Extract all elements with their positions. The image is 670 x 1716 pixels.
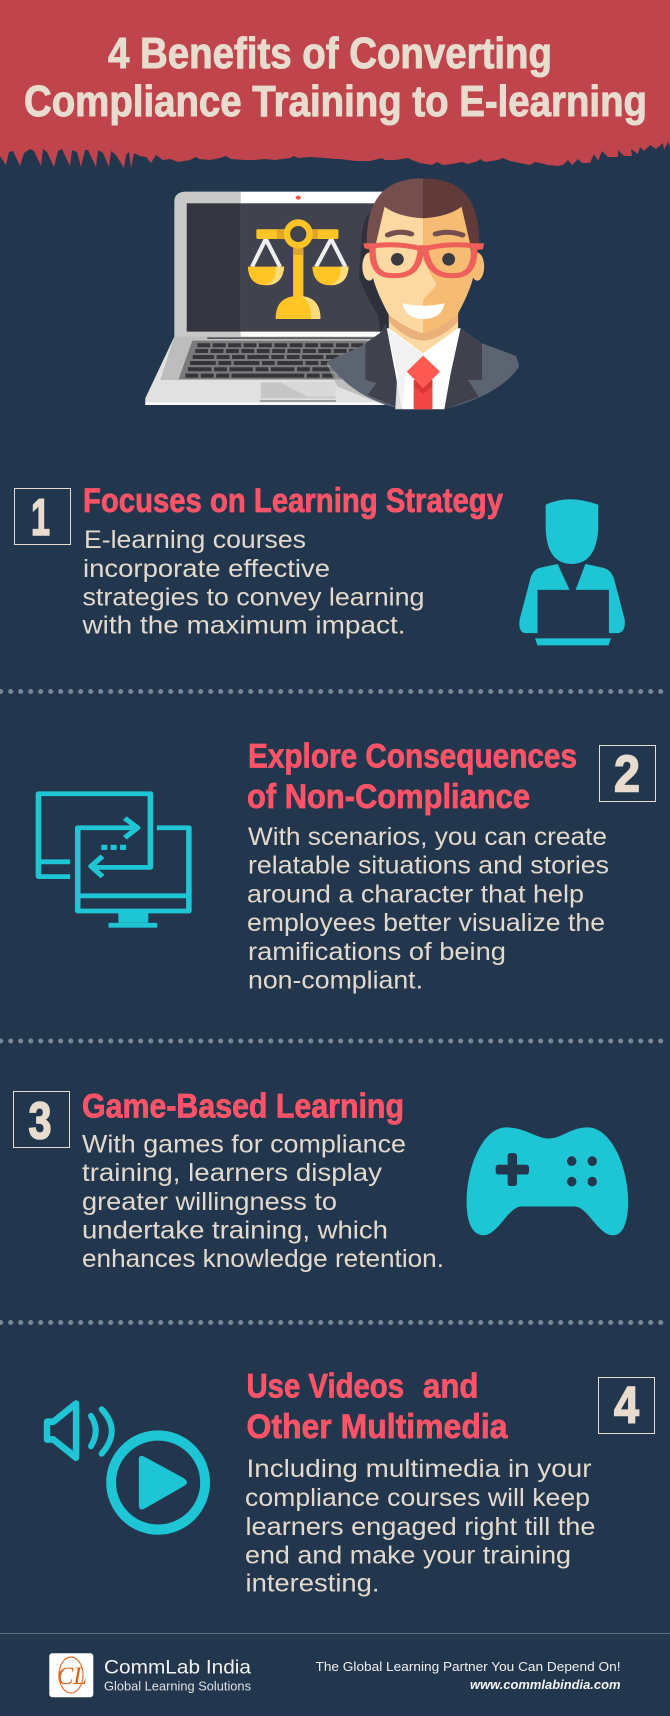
number badge 3: 3: [28, 1092, 52, 1150]
number badge 1: 1: [31, 489, 50, 547]
body text 4: Including multimedia in your: [246, 1455, 592, 1483]
body text 1: [81, 526, 425, 640]
section 3: [14, 1088, 628, 1273]
divider dots: [1, 1320, 670, 1325]
footer: [0, 1634, 670, 1697]
section 4: [47, 1368, 655, 1598]
body text 2: non-compliant.: [248, 966, 423, 994]
body text 4: learners engaged right till the: [246, 1513, 596, 1541]
body text 1: incorporate effective: [83, 555, 330, 583]
section 1: [14, 482, 625, 645]
body text 3: undertake training, which: [82, 1216, 388, 1244]
body text 1: strategies to convey learning: [82, 584, 425, 612]
body text 2: relatable situations and stories: [248, 852, 609, 880]
tagline: [316, 1659, 621, 1692]
body text 4: end and make your training: [245, 1542, 571, 1570]
character: [326, 178, 519, 409]
number badge 2: [600, 746, 656, 804]
body text 2: employees better visualize the: [247, 909, 605, 937]
body text 1: E-learning courses: [84, 526, 306, 554]
icon: speaker and play button: [47, 1404, 205, 1530]
heading 4: [246, 1368, 509, 1446]
body text 3: training, learners display: [82, 1159, 383, 1187]
body text 1: with the maximum impact.: [81, 612, 406, 640]
body text 2: [247, 823, 609, 994]
title: 4 Benefits of Converting: [108, 29, 552, 78]
icon: game controller: [467, 1127, 628, 1235]
laptop: [145, 192, 386, 405]
icon: connected monitors: [38, 794, 189, 928]
heading 2: of Non-Compliance: [247, 778, 530, 816]
logo mark: CL: [57, 1663, 87, 1690]
heading 1: Focuses on Learning Strategy: [83, 482, 503, 520]
company name: [104, 1656, 251, 1694]
body text 3: greater willingness to: [82, 1188, 337, 1216]
body text 2: With scenarios, you can create: [248, 823, 607, 851]
company name: CommLab India: [104, 1656, 251, 1678]
number badge 4: 4: [614, 1377, 639, 1435]
section 2: [38, 738, 655, 994]
number badge 3: [14, 1092, 70, 1150]
heading 4: and: [423, 1368, 478, 1406]
body text 2: around a character that help: [247, 880, 584, 908]
heading 2: [247, 738, 577, 816]
tagline: www.commlabindia.com: [470, 1677, 621, 1692]
logo mark: [49, 1653, 93, 1697]
body text 3: With games for compliance: [82, 1130, 406, 1158]
body text 3: enhances knowledge retention.: [82, 1245, 444, 1273]
body text 2: ramifications of being: [248, 938, 506, 966]
number badge 2: 2: [614, 746, 640, 804]
body text 4: [245, 1455, 596, 1598]
number badge 4: [598, 1377, 654, 1435]
heading 3: Game-Based Learning: [82, 1088, 404, 1126]
heading 4: Other Multimedia: [246, 1408, 509, 1446]
header banner: [0, 0, 670, 176]
icon: scales of justice: [248, 219, 349, 319]
company name: Global Learning Solutions: [104, 1678, 251, 1694]
tagline: The Global Learning Partner You Can Depend On!: [316, 1659, 620, 1674]
icon: person at laptop: [519, 499, 625, 645]
number badge 1: [14, 488, 70, 547]
divider dots: [1, 1038, 670, 1044]
heading 2: Explore Consequences: [248, 738, 577, 776]
illustration: laptop with scales and character: [145, 178, 519, 409]
body text 4: compliance courses will keep: [245, 1484, 590, 1512]
title: [24, 29, 647, 126]
body text 4: interesting.: [246, 1570, 380, 1598]
heading 4: Use Videos: [246, 1368, 404, 1406]
divider dots: [1, 689, 670, 694]
body text 3: [82, 1130, 444, 1273]
